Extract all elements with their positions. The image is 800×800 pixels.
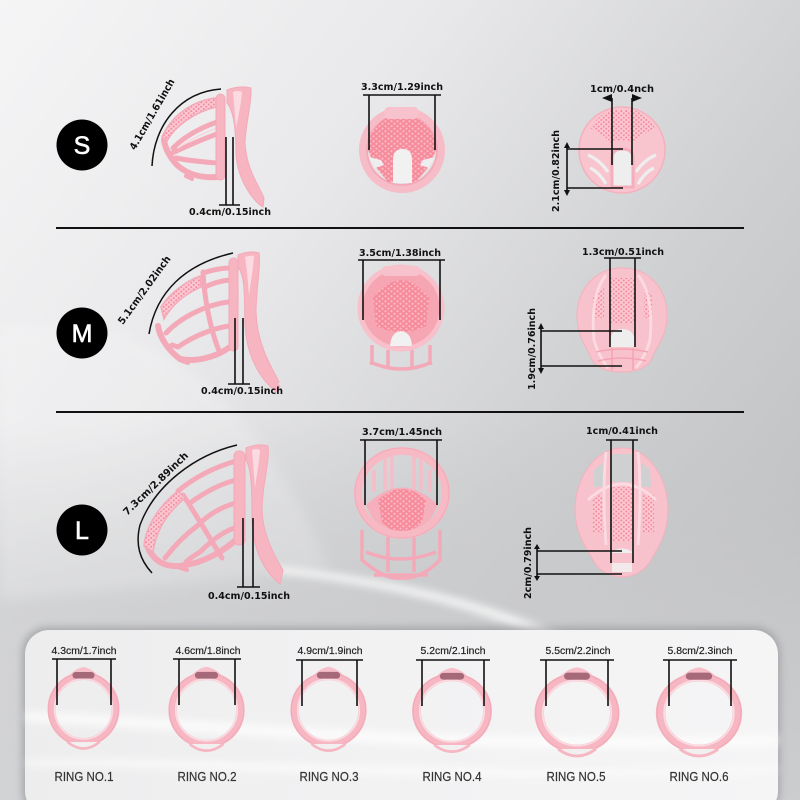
L side view: 7.3cm/2.89inch — [122, 450, 191, 518]
M side view: 5.1cm/2.02inch — [116, 254, 174, 327]
ring 5: RING NO.5 — [546, 769, 606, 784]
S front view: 3.3cm/1.29inch — [361, 82, 443, 93]
S rear view — [551, 84, 665, 212]
S side dimension: 0.4cm/0.15inch — [189, 207, 271, 218]
L front view — [355, 427, 449, 578]
divider lines — [56, 227, 744, 413]
panel: size L — [56, 426, 668, 602]
size badge L: L — [75, 517, 89, 545]
ring 1: RING NO.1 — [54, 769, 114, 784]
ring 3: 4.9cm/1.9inch — [298, 645, 363, 657]
S side view — [128, 77, 264, 207]
M front view: 3.5cm/1.38inch — [359, 248, 441, 259]
ring 1 — [48, 645, 118, 784]
ring 3 — [291, 645, 366, 784]
S rear view: 1cm/0.4nch — [590, 84, 654, 95]
ring 4: 5.2cm/2.1inch — [420, 645, 486, 657]
panel: size S — [56, 77, 665, 218]
ring 5: 5.5cm/2.2inch — [546, 645, 611, 657]
L rear view: 2cm/0.79inch — [523, 527, 534, 599]
ring 5 — [536, 645, 618, 784]
ring 6: 5.8cm/2.3inch — [668, 645, 733, 657]
ring 3: RING NO.3 — [300, 769, 358, 784]
size badge M: M — [72, 320, 92, 348]
ring 1: 4.3cm/1.7inch — [52, 645, 117, 657]
S side view: 4.1cm/1.61inch — [128, 77, 178, 152]
size badge S — [56, 120, 108, 170]
size badge L — [56, 504, 108, 556]
S rear view: 2.1cm/0.82inch — [551, 130, 562, 212]
M front view — [358, 248, 445, 369]
size badge M — [56, 308, 108, 358]
S front view — [361, 82, 443, 190]
L rear view — [523, 426, 668, 599]
M side dimension — [201, 318, 283, 397]
M rear view — [527, 247, 667, 390]
L rear view: 1cm/0.41inch — [586, 426, 658, 437]
M side view — [116, 252, 280, 392]
L front view: 3.7cm/1.45nch — [362, 427, 442, 438]
ring 4: RING NO.4 — [422, 769, 482, 784]
ring 6: RING NO.6 — [670, 769, 728, 784]
M rear view: 1.9cm/0.76inch — [527, 308, 538, 390]
L side dimension — [208, 518, 290, 602]
S side dimension — [189, 137, 271, 218]
ring 4 — [413, 645, 491, 784]
panel: size M — [56, 247, 667, 397]
panel: rings — [22, 627, 780, 800]
L side view — [122, 445, 283, 584]
L side dimension: 0.4cm/0.15inch — [208, 591, 290, 602]
ring 2: RING NO.2 — [178, 769, 236, 784]
ring 2: 4.6cm/1.8inch — [176, 645, 241, 657]
ring 2 — [169, 645, 244, 784]
ring 6 — [657, 645, 741, 784]
M rear view: 1.3cm/0.51inch — [582, 247, 664, 258]
size badge S: S — [74, 132, 90, 160]
M side dimension: 0.4cm/0.15inch — [201, 386, 283, 397]
